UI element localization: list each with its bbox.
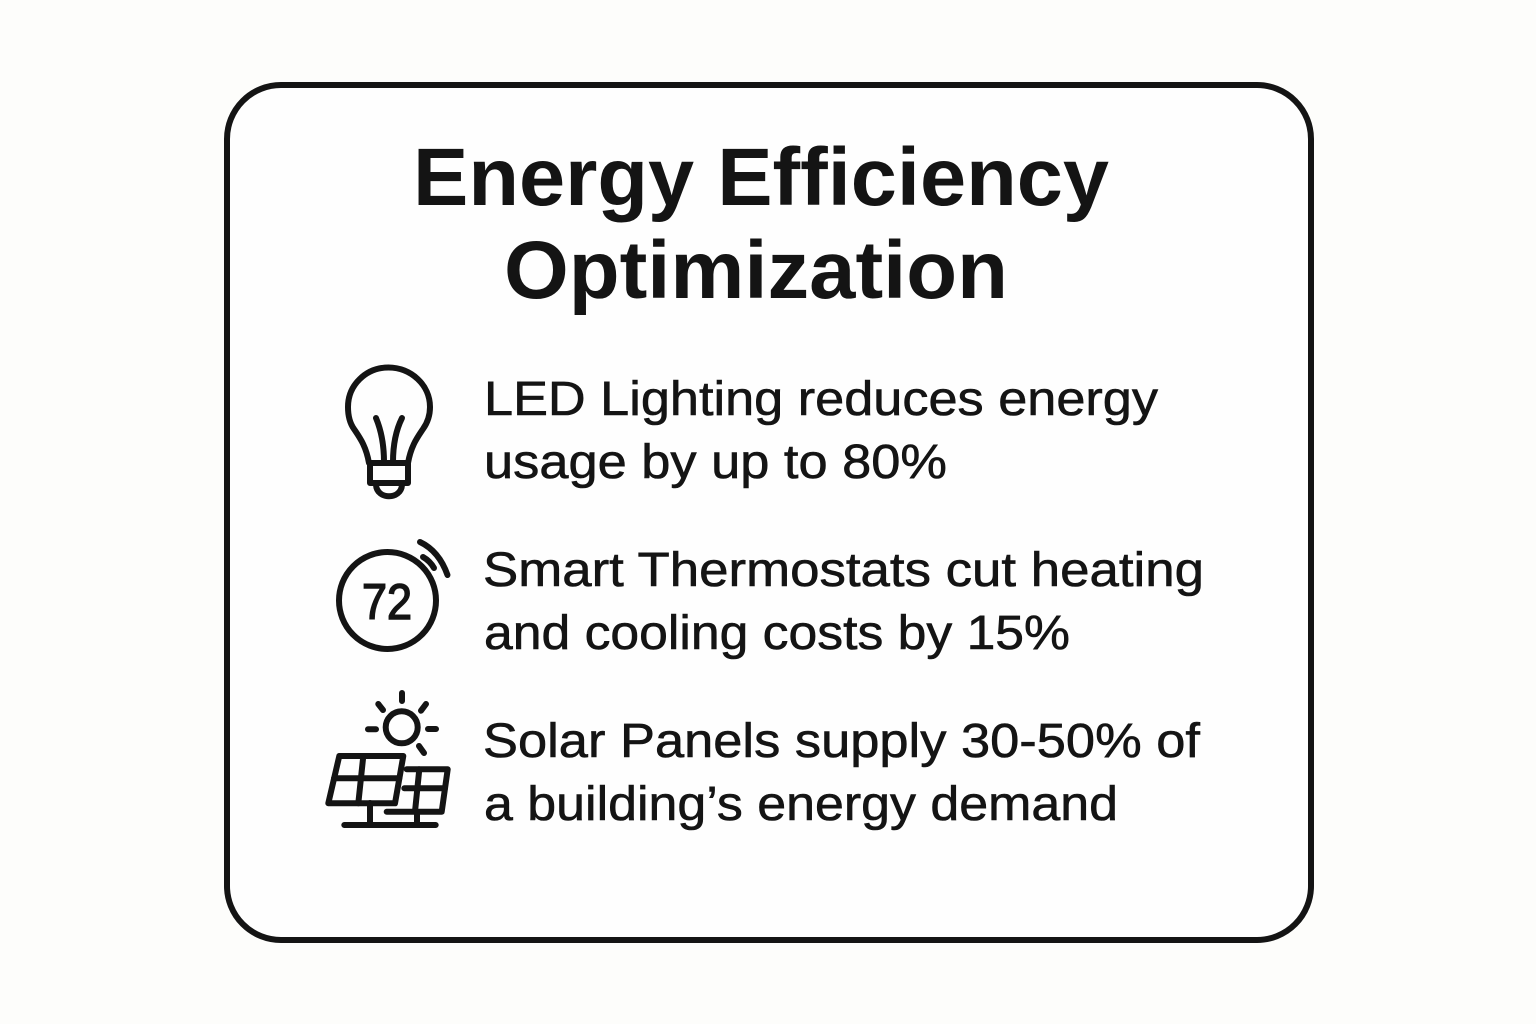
title [413, 132, 1109, 316]
text: LED lighting: LED Lighting reduces energy [484, 373, 1158, 426]
title: Energy Efficiency [413, 132, 1109, 223]
icon: smart thermostat: 72 [362, 574, 412, 630]
title: Optimization [504, 225, 1008, 316]
text: solar panels [483, 715, 1201, 831]
text: smart thermostats [483, 544, 1204, 660]
panel: rounded card [227, 85, 1311, 940]
icon: sun and solar panels [328, 693, 448, 825]
icon: smart thermostat [339, 542, 448, 649]
icon: light bulb [348, 368, 430, 496]
text: LED lighting: usage by up to 80% [484, 436, 947, 489]
text: smart thermostats: Smart Thermostats cut heating [483, 544, 1204, 597]
text: solar panels: Solar Panels supply 30-50% of [483, 715, 1201, 768]
text: LED lighting [484, 373, 1158, 489]
text: smart thermostats: and cooling costs by 15% [484, 607, 1070, 660]
text: solar panels: a building’s energy demand [484, 778, 1118, 831]
